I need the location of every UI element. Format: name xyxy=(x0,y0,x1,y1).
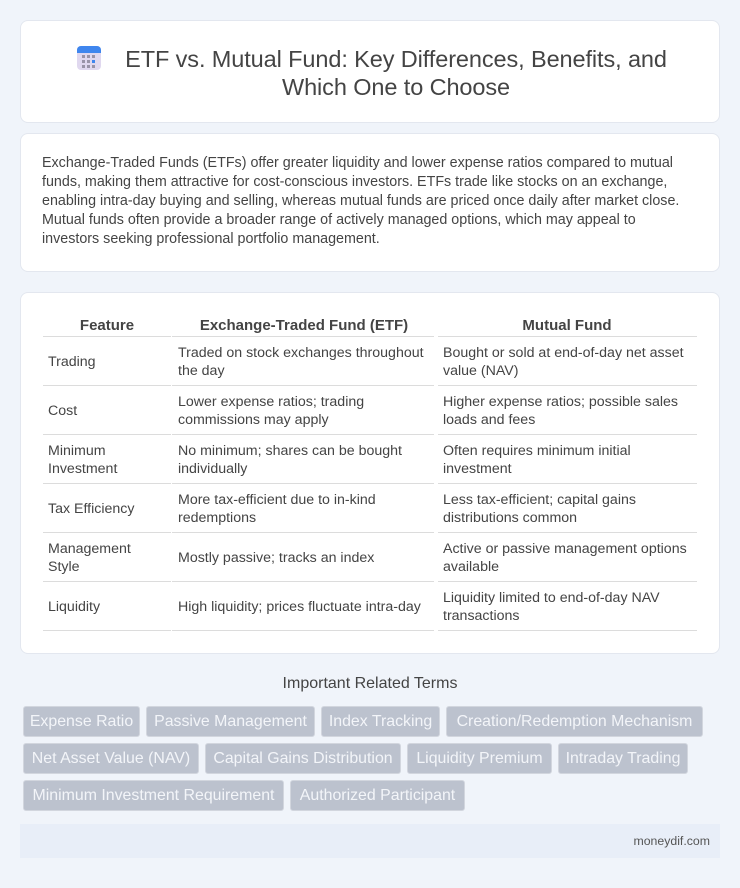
title xyxy=(125,46,667,100)
row: liquidity xyxy=(48,590,660,624)
row: tax efficiency xyxy=(48,492,636,526)
tag group: related terms: Index Tracking xyxy=(329,713,432,730)
row: management style: Mostly passive; tracks an index xyxy=(178,550,374,566)
row: trading: Trading xyxy=(48,354,96,370)
row: management style: available xyxy=(443,559,499,575)
panel: comparison table xyxy=(20,292,720,654)
row: tax efficiency: distributions common xyxy=(443,510,577,526)
row: tax efficiency: Tax Efficiency xyxy=(48,501,134,517)
intro text: enabling intra-day buying and selling, whereas mutual funds are priced once daily after market close. xyxy=(42,193,679,209)
row: management style: Active or passive management options xyxy=(443,541,687,557)
table header xyxy=(80,317,612,334)
row: cost: Higher expense ratios; possible sales xyxy=(443,394,678,410)
row: cost: Lower expense ratios; trading xyxy=(178,394,364,410)
tag group: related terms: Net Asset Value (NAV) xyxy=(32,750,190,767)
tag group: related terms: Minimum Investment Requirement xyxy=(32,787,274,804)
row: trading xyxy=(48,345,684,379)
tag group: related terms: Creation/Redemption Mechanism xyxy=(457,713,692,730)
row: tax efficiency: Less tax-efficient; capital gains xyxy=(443,492,636,508)
footer xyxy=(20,824,720,858)
row: minimum investment: Investment xyxy=(48,461,117,477)
row: liquidity: Liquidity limited to end-of-day NAV xyxy=(443,590,660,606)
tag group: related terms: Liquidity Premium xyxy=(416,750,543,767)
title: Which One to Choose xyxy=(282,74,510,100)
tag group: related terms: Expense Ratio xyxy=(30,713,133,730)
tag group: related terms: Intraday Trading xyxy=(566,750,680,767)
panel: introduction xyxy=(20,133,720,272)
tag group: related terms: Passive Management xyxy=(154,713,307,730)
row: trading: the day xyxy=(178,363,225,379)
row: minimum investment: investment xyxy=(443,461,512,477)
row: liquidity: transactions xyxy=(443,608,520,624)
row: cost: commissions may apply xyxy=(178,412,329,428)
row: minimum investment: Often requires minimum initial xyxy=(443,443,631,459)
row: cost: Cost xyxy=(48,403,77,419)
row: cost: loads and fees xyxy=(443,412,535,428)
intro text: Exchange-Traded Funds (ETFs) offer greater liquidity and lower expense ratios compared to mutual xyxy=(42,155,673,171)
table header: Exchange-Traded Fund (ETF) xyxy=(200,317,408,334)
tag group: related terms: Capital Gains Distribution xyxy=(213,750,393,767)
row: tax efficiency: More tax-efficient due to in-kind xyxy=(178,492,376,508)
row: trading: Traded on stock exchanges throughout xyxy=(178,345,424,361)
row: management style: Management xyxy=(48,541,131,557)
footer source: moneydif.com xyxy=(633,834,710,848)
row: cost xyxy=(48,394,678,428)
row: trading: value (NAV) xyxy=(443,363,518,379)
row: management style xyxy=(48,541,687,575)
row: minimum investment: Minimum xyxy=(48,443,106,459)
table header: Feature xyxy=(80,317,134,334)
title: ETF vs. Mutual Fund: Key Differences, Benefits, and xyxy=(125,46,667,72)
intro text xyxy=(42,155,679,247)
tag group: related terms xyxy=(23,706,703,811)
row: minimum investment: No minimum; shares can be bought xyxy=(178,443,402,459)
table header: Mutual Fund xyxy=(522,317,612,334)
panel: title card xyxy=(20,20,720,123)
intro text: funds, making them attractive for cost-conscious investors. ETFs trade like stocks on an exchange, xyxy=(42,174,667,190)
row: management style: Style xyxy=(48,559,80,575)
row: minimum investment: individually xyxy=(178,461,247,477)
row: trading: Bought or sold at end-of-day net asset xyxy=(443,345,684,361)
intro text: investors seeking professional portfolio management. xyxy=(42,231,380,247)
row: tax efficiency: redemptions xyxy=(178,510,256,526)
row: liquidity: High liquidity; prices fluctuate intra-day xyxy=(178,599,421,615)
row: minimum investment xyxy=(48,443,631,477)
heading: related terms: Important Related Terms xyxy=(283,675,457,692)
icon: calendar xyxy=(77,46,101,70)
tag group: related terms: Authorized Participant xyxy=(300,787,455,804)
row: liquidity: Liquidity xyxy=(48,599,100,615)
intro text: Mutual funds often provide a broader range of actively managed options, which may appeal to xyxy=(42,212,636,228)
